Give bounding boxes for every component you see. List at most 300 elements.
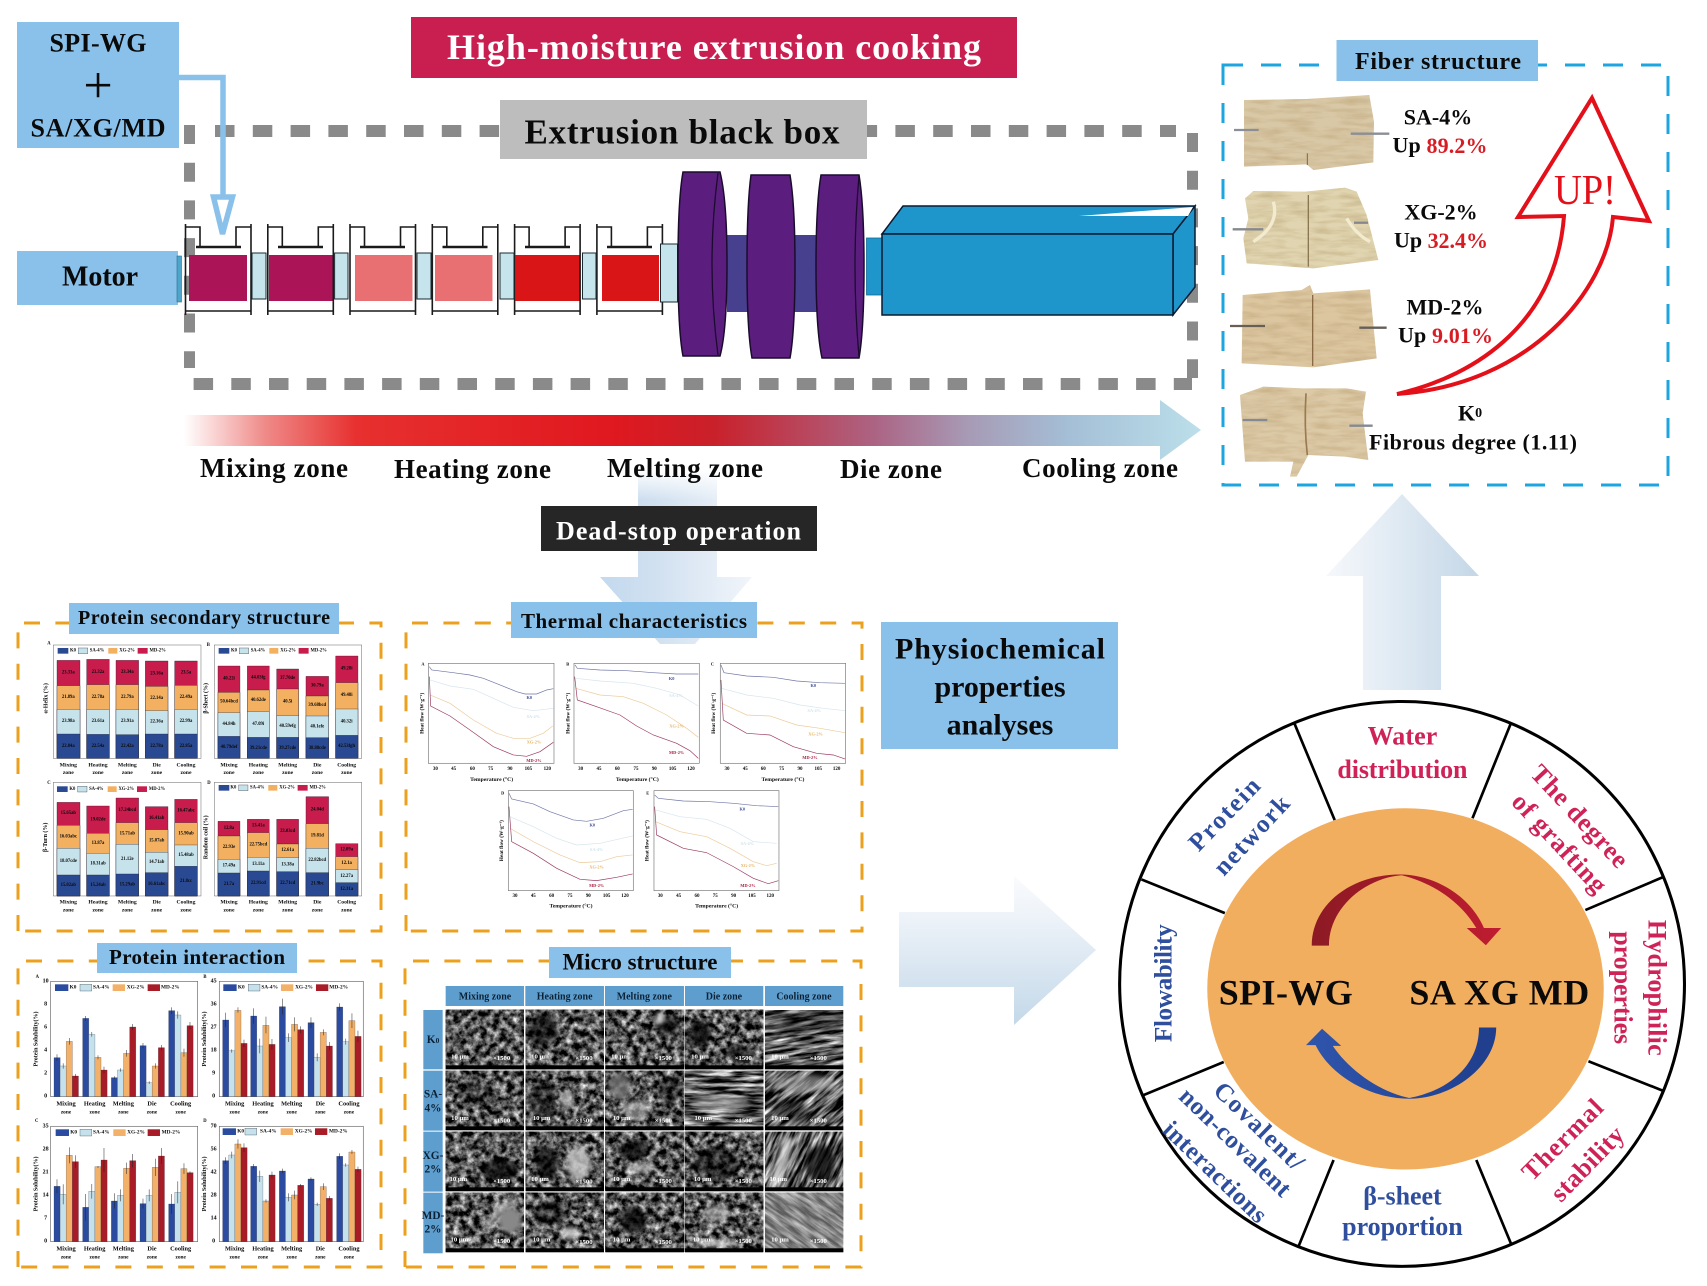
label: Protein network: Protein (1183, 772, 1266, 857)
chart E: DSC: XG-2% (741, 863, 755, 868)
panel: micro structure (404, 947, 862, 1268)
chart D: protein solubility: MD-2% (329, 1129, 348, 1135)
chart D: DSC: XG-2% (589, 864, 604, 869)
chart D: protein solubility: Melting (281, 1245, 303, 1252)
photo: XG-2% sample (1233, 188, 1378, 268)
outer ring (1120, 701, 1684, 1266)
chart D: DSC: Heat flow (W·g⁻¹) (498, 820, 505, 861)
chart D: random coil: 12.61a (281, 848, 295, 853)
chart A: alpha-helix: MD-2% (150, 648, 166, 653)
chart A: alpha-helix: zone (63, 770, 74, 776)
chart B: protein solubility: 36 (211, 1001, 217, 1007)
chart C: beta-turn: 16.03abc (60, 834, 77, 839)
chart D: protein solubility: SA-4% (260, 1129, 277, 1135)
chart C: DSC: 90 (797, 767, 803, 772)
chart A: alpha-helix: 23.61a (92, 719, 105, 724)
input box: SPI-WG + SA/XG/MD: + (83, 58, 113, 114)
row headers: 2% (424, 1223, 441, 1235)
chart B: beta-sheet: 38.88cde (309, 746, 326, 751)
chart B: beta-sheet: 40.32i (341, 719, 353, 724)
zone labels: Melting zone (607, 453, 763, 483)
chart A: alpha-helix: XG-2% (119, 648, 135, 653)
chart A: alpha-helix: zone (122, 770, 133, 776)
chart A: protein solubility: Heating (84, 1100, 106, 1107)
chart B: beta-sheet: XG-2% (280, 648, 296, 653)
chart B: beta-sheet: 39.27cde (279, 746, 296, 751)
chart A: alpha-helix: 23.5a (181, 670, 192, 675)
label: Water distribution: Water (1368, 721, 1437, 750)
result labels: MD-2% (1407, 294, 1483, 320)
chart C: DSC: XG-2% (808, 731, 823, 736)
chart D: random coil: Random coil (%) (203, 815, 210, 859)
chart C: beta-turn: 15.90ab (178, 831, 194, 836)
chart A: alpha-helix: Die (153, 762, 161, 768)
chart D: DSC (498, 790, 633, 910)
panel: protein secondary structure (18, 603, 381, 931)
chart B: DSC: XG-2% (669, 723, 684, 728)
chart B: beta-sheet: 40.59efg (279, 724, 297, 729)
chart D: DSC: 60 (549, 894, 555, 899)
chart C: beta-turn: 21.12e (121, 857, 134, 862)
arrow: properties up to fiber structure (1326, 494, 1479, 690)
chart D: random coil: 12.1a (341, 861, 353, 866)
SEM captions: 10 μm (613, 1176, 631, 1183)
die discs (678, 172, 864, 358)
chart A: alpha-helix: 22.42a (121, 744, 134, 749)
chart B: beta-sheet (203, 643, 362, 776)
label: beta-sheet proportion (1342, 1181, 1463, 1241)
chart B: beta-sheet: zone (253, 770, 264, 776)
SEM captions: ×1500 (810, 1178, 828, 1185)
arrow: analyses right to wheel (899, 876, 1096, 1025)
motor box: Motor (62, 262, 138, 292)
chart A: alpha-helix: 23.34a (121, 670, 134, 675)
chart E: DSC: SA-4% (741, 841, 754, 846)
label: Hydrophilic properties: properties (1608, 931, 1637, 1044)
coloured heating zones (189, 255, 659, 301)
chart C: DSC: 120 (833, 767, 841, 772)
chart D: protein solubility: K0 (237, 1129, 244, 1135)
chart C: beta-turn (42, 781, 201, 913)
chart C: DSC: Heat flow (W·g⁻¹) (710, 693, 717, 734)
SEM captions: 10 μm (691, 1053, 709, 1060)
arrow: UP! (1397, 98, 1649, 394)
chart D: random coil: 21.9bc (311, 881, 324, 886)
chart A: alpha-helix: 21.89a (62, 695, 75, 700)
stacked bar charts (42, 641, 362, 913)
chart A: protein solubility: Protein Solubility(%) (33, 1012, 40, 1066)
chart D: random coil: 22.93e (223, 845, 235, 850)
label: Covalent/non-covalent interactions: interactions (1157, 1116, 1273, 1229)
chart B: DSC: B (566, 661, 569, 666)
row K0 images (446, 1010, 844, 1070)
label: Dead-stop operation (541, 506, 817, 551)
chart B: DSC: Heat flow (W·g⁻¹) (564, 693, 571, 734)
chart B: beta-sheet: 49.48i (341, 693, 353, 698)
column headers (446, 986, 843, 1006)
box: Physiochemical properties analyses: Physiochemical (895, 632, 1105, 666)
SEM captions: ×1500 (655, 1117, 673, 1124)
chart C: protein solubility: 14 (43, 1192, 49, 1198)
chart E: DSC: 120 (767, 894, 775, 899)
extruder barrels (186, 224, 678, 315)
title: High-moisture extrusion cooking (411, 17, 1017, 78)
chart C: beta-turn: 16.41ab (149, 816, 165, 821)
chart C: beta-turn: 15.07ab (149, 838, 165, 843)
result labels: K0 (1458, 400, 1482, 426)
chart A: protein solubility: Mixing (56, 1100, 76, 1107)
chart D: random coil: 22.71cd (280, 881, 296, 886)
chart B: beta-sheet: MD-2% (310, 648, 327, 653)
chart D: random coil: zone (312, 907, 323, 913)
chart C: DSC: 75 (779, 767, 785, 772)
chart A: alpha-helix: Melting (118, 762, 137, 768)
chart E: DSC (644, 790, 779, 910)
result labels: SA-4% (1404, 104, 1472, 130)
chart C: protein solubility: 35 (43, 1123, 49, 1129)
chart A: DSC: 90 (507, 767, 513, 772)
chart A: DSC: Heat flow (W·g⁻¹) (419, 693, 426, 734)
chart C: protein solubility: XG-2% (127, 1130, 145, 1136)
chart C: beta-turn: Heating (88, 900, 108, 906)
chart A: DSC: K0 (527, 695, 532, 700)
SEM captions: 10 μm (450, 1176, 468, 1183)
SEM captions: ×1500 (575, 1239, 593, 1246)
chart B: beta-sheet: Cooling (337, 762, 356, 768)
core labels (1219, 972, 1589, 1012)
chart A: alpha-helix: zone (151, 770, 163, 776)
chart C: protein solubility: zone (89, 1254, 100, 1260)
chart B: DSC (564, 661, 699, 783)
label: Water distribution: distribution (1337, 755, 1468, 784)
chart C: beta-turn: Die (153, 900, 161, 906)
label: The degree of grafting: The degree (1525, 759, 1635, 874)
chart A: alpha-helix: 23.16a (150, 671, 164, 676)
cooling die block (866, 206, 1195, 315)
chart C: DSC: K0 (811, 683, 816, 688)
chart A: DSC: Temperature (°C) (470, 776, 513, 783)
label: Hydrophilic properties: Hydrophilic (1642, 920, 1671, 1056)
chart B: beta-sheet: zone (312, 770, 323, 776)
heading: Micro structure (549, 947, 731, 978)
chart C: protein solubility: Mixing (56, 1245, 76, 1252)
panel: thermal characteristics (406, 602, 862, 931)
chart A: DSC: 30 (433, 767, 438, 772)
SEM captions: 10 μm (693, 1236, 711, 1243)
chart D: protein solubility: 70 (211, 1123, 217, 1129)
chart D: random coil: Cooling (337, 900, 356, 906)
chart C: beta-turn: SA-4% (89, 787, 104, 792)
chart A: DSC (419, 661, 554, 783)
chart A: alpha-helix: 22.36a (150, 719, 164, 724)
chart B: beta-sheet: 40.79def (221, 745, 238, 750)
SEM captions: ×1500 (493, 1238, 511, 1245)
SEM scale bars (446, 1065, 843, 1252)
chart B: beta-sheet: zone (223, 770, 235, 776)
chart D: random coil: Die (313, 900, 322, 906)
chart C: beta-turn: 21.8cc (180, 879, 192, 884)
chart E: DSC: 45 (676, 894, 682, 899)
chart A: alpha-helix: K0 (70, 648, 77, 653)
chart A: alpha-helix: SA-4% (90, 648, 105, 653)
chart D: random coil: MD-2% (309, 785, 326, 790)
SEM captions: ×1500 (810, 1055, 828, 1062)
chart B: DSC: Temperature (°C) (616, 776, 659, 783)
zone labels: Die zone (840, 454, 942, 484)
chart D: protein solubility: XG-2% (295, 1129, 313, 1135)
chart B: protein solubility: Die (316, 1100, 325, 1107)
panel: fiber structure (1223, 40, 1668, 485)
chart D: random coil: D (207, 781, 211, 786)
heading: Protein secondary structure (69, 603, 339, 634)
chart C: protein solubility: C (35, 1119, 39, 1124)
chart C: protein solubility: K0 (70, 1130, 77, 1136)
chart B: beta-sheet: β-Sheet (%) (203, 683, 210, 714)
chart E: DSC: 90 (731, 894, 737, 899)
barrel outlines and hoppers (186, 224, 662, 315)
chart D: random coil: 12.31a (340, 887, 354, 892)
chart B: DSC: 90 (652, 767, 657, 772)
chart B: beta-sheet: Heating (249, 762, 268, 768)
chart C: protein solubility (33, 1119, 198, 1260)
chart A: DSC: 75 (488, 767, 494, 772)
chart C: protein solubility: zone (61, 1254, 72, 1260)
chart A: alpha-helix: 22.54a (92, 744, 105, 749)
label: Thermal stability: stability (1544, 1120, 1630, 1207)
SEM captions: 10 μm (611, 1053, 629, 1060)
chart D: DSC: Temperature (°C) (550, 903, 593, 910)
arrow: temperature gradient along zones (184, 400, 1201, 460)
chart A: alpha-helix: 22.14a (150, 696, 164, 701)
chart D: DSC: 120 (621, 894, 629, 899)
chart D: protein solubility: 42 (211, 1169, 217, 1175)
SEM captions: ×1500 (575, 1178, 593, 1185)
column header text: Mixing zone (459, 991, 512, 1002)
chart A: protein solubility: 6 (44, 1024, 47, 1030)
chart B: beta-sheet: 39.21cde (250, 746, 267, 751)
heading: Extrusion black box: Extrusion black box (524, 112, 840, 152)
chart A: protein solubility: XG-2% (127, 985, 145, 991)
SEM captions: ×1500 (493, 1178, 511, 1185)
chart E: DSC: E (646, 790, 649, 795)
chart D: random coil: SA-4% (250, 785, 265, 790)
zone labels: Mixing zone (200, 453, 348, 483)
chart B: protein solubility: zone (229, 1109, 240, 1115)
label: Covalent/non-covalent interactions: non-covalent (1173, 1082, 1297, 1203)
chart A: alpha-helix: 23.98a (62, 719, 75, 724)
chart D: protein solubility: 0 (212, 1239, 215, 1245)
chart C: protein solubility: Die (147, 1245, 157, 1252)
chart C: protein solubility: MD-2% (162, 1130, 180, 1136)
chart A: protein solubility: 0 (44, 1094, 47, 1100)
photo: K0 sample (1240, 387, 1373, 477)
label: Hydrophilic properties (1608, 920, 1671, 1056)
chart D: random coil: 23.03cd (280, 829, 296, 834)
chart B: beta-sheet: Mixing (220, 762, 238, 768)
SEM captions: ×1500 (575, 1117, 593, 1124)
chart D: protein solubility (201, 1119, 363, 1260)
row headers: K0 (427, 1034, 440, 1046)
chart A: alpha-helix: 22.49a (180, 695, 193, 700)
chart A: alpha-helix: 22.84a (62, 744, 75, 749)
chart B: protein solubility: zone (286, 1109, 297, 1115)
chart A: protein solubility: zone (89, 1109, 100, 1115)
label: The degree of grafting (1506, 759, 1635, 899)
chart B: protein solubility: zone (258, 1109, 269, 1115)
chart A: protein solubility: Cooling (170, 1100, 192, 1107)
chart D: random coil: Melting (278, 900, 297, 906)
chart D: protein solubility: zone (286, 1254, 297, 1260)
column header text: Die zone (706, 991, 743, 1002)
result labels (1369, 104, 1577, 454)
chart D: protein solubility: Heating (252, 1245, 275, 1252)
chart B: beta-sheet: 30.79a (311, 683, 324, 688)
chart C: beta-turn: 15.48ab (178, 853, 194, 858)
chart C: beta-turn: zone (151, 907, 163, 913)
grouped bar charts (33, 975, 363, 1260)
result labels: XG-2% (1404, 200, 1478, 224)
heading: Thermal characteristics (511, 602, 757, 638)
chart A: alpha-helix: 23.33a (62, 670, 75, 675)
SEM captions: 10 μm (613, 1236, 631, 1243)
chart C: beta-turn: 14.71ab (149, 860, 165, 865)
chart A: protein solubility: 10 (43, 978, 49, 984)
zone labels: Cooling zone (1022, 453, 1178, 483)
orange core (1207, 808, 1604, 1170)
chart D: DSC: 45 (531, 894, 536, 899)
chart B: protein solubility: 27 (211, 1024, 217, 1030)
chart C: DSC: 45 (743, 767, 748, 772)
arrow: dead-stop flow down (600, 470, 752, 644)
result labels: Up 89.2% (1392, 132, 1488, 158)
chart B: protein solubility: MD-2% (329, 985, 348, 991)
chart B: protein solubility: 9 (212, 1071, 215, 1077)
chart A: protein solubility (33, 975, 198, 1115)
SEM captions: ×1500 (735, 1055, 753, 1062)
chart C: protein solubility: 21 (43, 1169, 49, 1175)
chart B: beta-sheet: 40.1efe (310, 724, 324, 729)
input box: SPI-WG + SA/XG/MD (17, 22, 179, 148)
SEM captions: ×1500 (735, 1178, 753, 1185)
chart A: protein solubility: zone (61, 1109, 72, 1115)
SEM captions: ×1500 (655, 1239, 673, 1246)
chart B: beta-sheet: 40.22i (223, 676, 236, 681)
chart B: DSC: K0 (669, 676, 674, 681)
chart A: alpha-helix: 22.78a (150, 744, 164, 749)
chart A: protein solubility: zone (147, 1109, 158, 1115)
chart B: beta-sheet: 47.09i (252, 722, 265, 727)
heading: Thermal characteristics: Thermal characteristics (521, 609, 747, 633)
chart C: protein solubility: Protein Solubility(%) (33, 1157, 40, 1211)
chart B: beta-sheet: 44.03fg (251, 675, 266, 680)
chart D: protein solubility: D (203, 1119, 207, 1124)
chart B: protein solubility (201, 975, 363, 1115)
chart D: random coil: zone (282, 907, 294, 913)
chart A: DSC: 60 (470, 767, 475, 772)
SEM captions (450, 1053, 828, 1246)
row SA-4% images (446, 1070, 844, 1130)
chart B: protein solubility: B (203, 975, 207, 980)
chart D: random coil: 13.11a (252, 862, 265, 867)
SEM captions: ×1500 (810, 1117, 828, 1124)
chart B: protein solubility: K0 (238, 985, 245, 991)
chart B: beta-sheet: 49.28i (341, 666, 353, 671)
chart D: protein solubility: Mixing (225, 1245, 245, 1252)
chart B: beta-sheet: 40.62de (251, 698, 266, 703)
chart B: DSC: 45 (596, 767, 602, 772)
SEM captions: ×1500 (655, 1055, 673, 1062)
chart C: beta-turn: zone (63, 907, 74, 913)
arrow: UP!: UP! (1554, 168, 1616, 214)
chart A: protein solubility: Die (147, 1100, 157, 1107)
label: Thermal stability (1516, 1093, 1630, 1207)
chart A: alpha-helix: 22.79a (121, 695, 134, 700)
chart C: beta-turn: Mixing (60, 900, 77, 906)
chart C: protein solubility: 28 (43, 1146, 49, 1152)
chart D: random coil (203, 781, 362, 913)
SEM captions: 10 μm (694, 1176, 712, 1183)
arrow: red forward (1312, 874, 1501, 946)
chart D: random coil: zone (341, 907, 353, 913)
SEM captions: 10 μm (771, 1236, 789, 1243)
heading: Micro structure: Micro structure (562, 950, 718, 974)
row XG-2% images (446, 1132, 844, 1191)
heading: Protein secondary structure: Protein secondary structure (78, 607, 330, 629)
SEM captions: 10 μm (769, 1176, 788, 1183)
chart A: alpha-helix: 23.91a (121, 719, 134, 724)
chart E: DSC: Temperature (°C) (695, 903, 738, 910)
chart A: protein solubility: 8 (44, 1001, 47, 1007)
chart C: DSC: MD-2% (802, 755, 818, 760)
chart C: beta-turn: 15.24ab (90, 883, 106, 888)
chart A: DSC: MD-2% (526, 758, 542, 763)
chart C: beta-turn: 16.47abc (177, 808, 195, 813)
SEM image grid (422, 986, 844, 1254)
zone labels (200, 453, 1178, 484)
chart C: beta-turn: 15.29ab (120, 882, 135, 887)
chart A: DSC: A (421, 661, 425, 666)
chart D: random coil: 12.09a (340, 847, 354, 852)
label: Covalent/non-covalent interactions (1157, 1076, 1311, 1229)
chart C: protein solubility: zone (118, 1254, 129, 1260)
chart D: random coil: 13.41a (252, 823, 265, 828)
chart D: random coil: 21.7a (224, 882, 235, 887)
chart A: protein solubility: zone (118, 1109, 129, 1115)
box: Physiochemical properties analyses (881, 622, 1118, 749)
column header text (459, 991, 832, 1002)
chart B: protein solubility: Cooling (338, 1100, 360, 1107)
row headers: MD- (422, 1210, 445, 1222)
label: Protein network (1183, 772, 1296, 881)
chart C: DSC: Temperature (°C) (761, 776, 805, 783)
SEM captions: 10 μm (771, 1115, 789, 1122)
chart A: protein solubility: 4 (44, 1047, 47, 1053)
chart C: DSC (710, 661, 846, 783)
row headers (422, 1010, 445, 1253)
column header text: Melting zone (617, 991, 672, 1002)
box: Physiochemical properties analyses: analyses (947, 708, 1053, 742)
chart D: random coil: zone (253, 907, 264, 913)
chart B: DSC: 105 (669, 767, 677, 772)
row headers: 4% (424, 1103, 441, 1115)
chart D: random coil: XG-2% (279, 785, 295, 790)
chart A: alpha-helix: 22.85a (180, 744, 193, 749)
chart D: random coil: 12.27a (340, 874, 354, 879)
SEM captions: 10 μm (451, 1236, 469, 1243)
chart C: DSC: SA-4% (808, 708, 821, 713)
chart C: protein solubility: Melting (113, 1245, 135, 1252)
chart B: DSC: SA-4% (669, 693, 683, 698)
